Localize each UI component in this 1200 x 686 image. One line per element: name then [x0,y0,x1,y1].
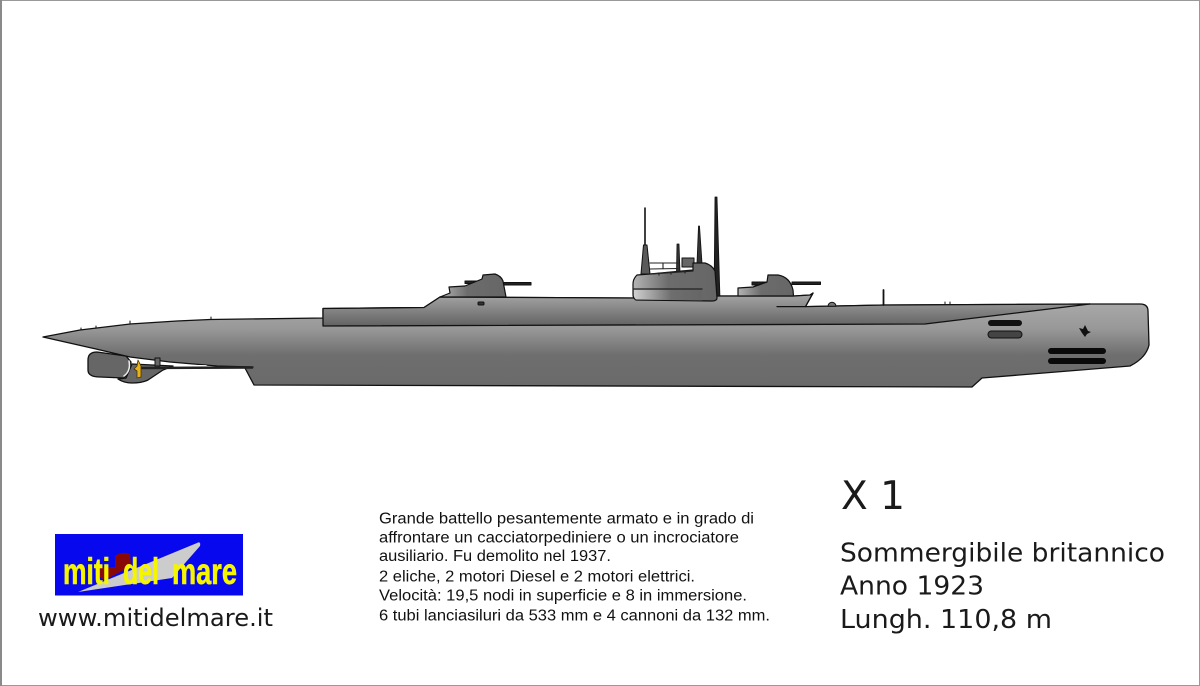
rudder pod [88,352,131,378]
vessel details: Lungh. 110,8 m [840,605,1052,635]
website: www.mitidelmare.it [38,604,273,632]
description [379,510,770,624]
anchor [1079,325,1091,337]
small hatch [478,302,484,305]
description: Grande battello pesantemente armato e in grado di [379,510,754,528]
description: 2 eliche, 2 motori Diesel e 2 motori elettrici. [379,568,695,586]
description: 6 tubi lanciasiluri da 533 mm e 4 cannoni da 132 mm. [379,608,770,624]
vessel details: Sommergibile britannico [840,538,1165,568]
description: affrontare un cacciatorpediniere o un incrociatore [379,530,739,546]
logo [55,534,243,596]
vessel details [840,538,1165,635]
masts [641,197,720,299]
deck fittings [81,290,950,330]
hull [43,293,1149,387]
gun turret, aft [738,275,820,296]
hull slots [988,320,1106,364]
casing [323,293,1090,326]
gun turret, fore [440,274,531,297]
logo: del [123,551,159,592]
logo: miti [63,551,110,592]
submarine drawing [43,197,1149,387]
logo: mare [172,551,237,592]
lower skeg [118,364,173,383]
description: ausiliario. Fu demolito nel 1937. [379,548,611,565]
vessel details: Anno 1923 [840,572,984,602]
conning tower [633,258,717,301]
description: Velocità: 19,5 nodi in superficie e 8 in immersione. [379,588,747,604]
shaft and propeller [124,358,252,378]
title: X 1 [841,474,905,519]
